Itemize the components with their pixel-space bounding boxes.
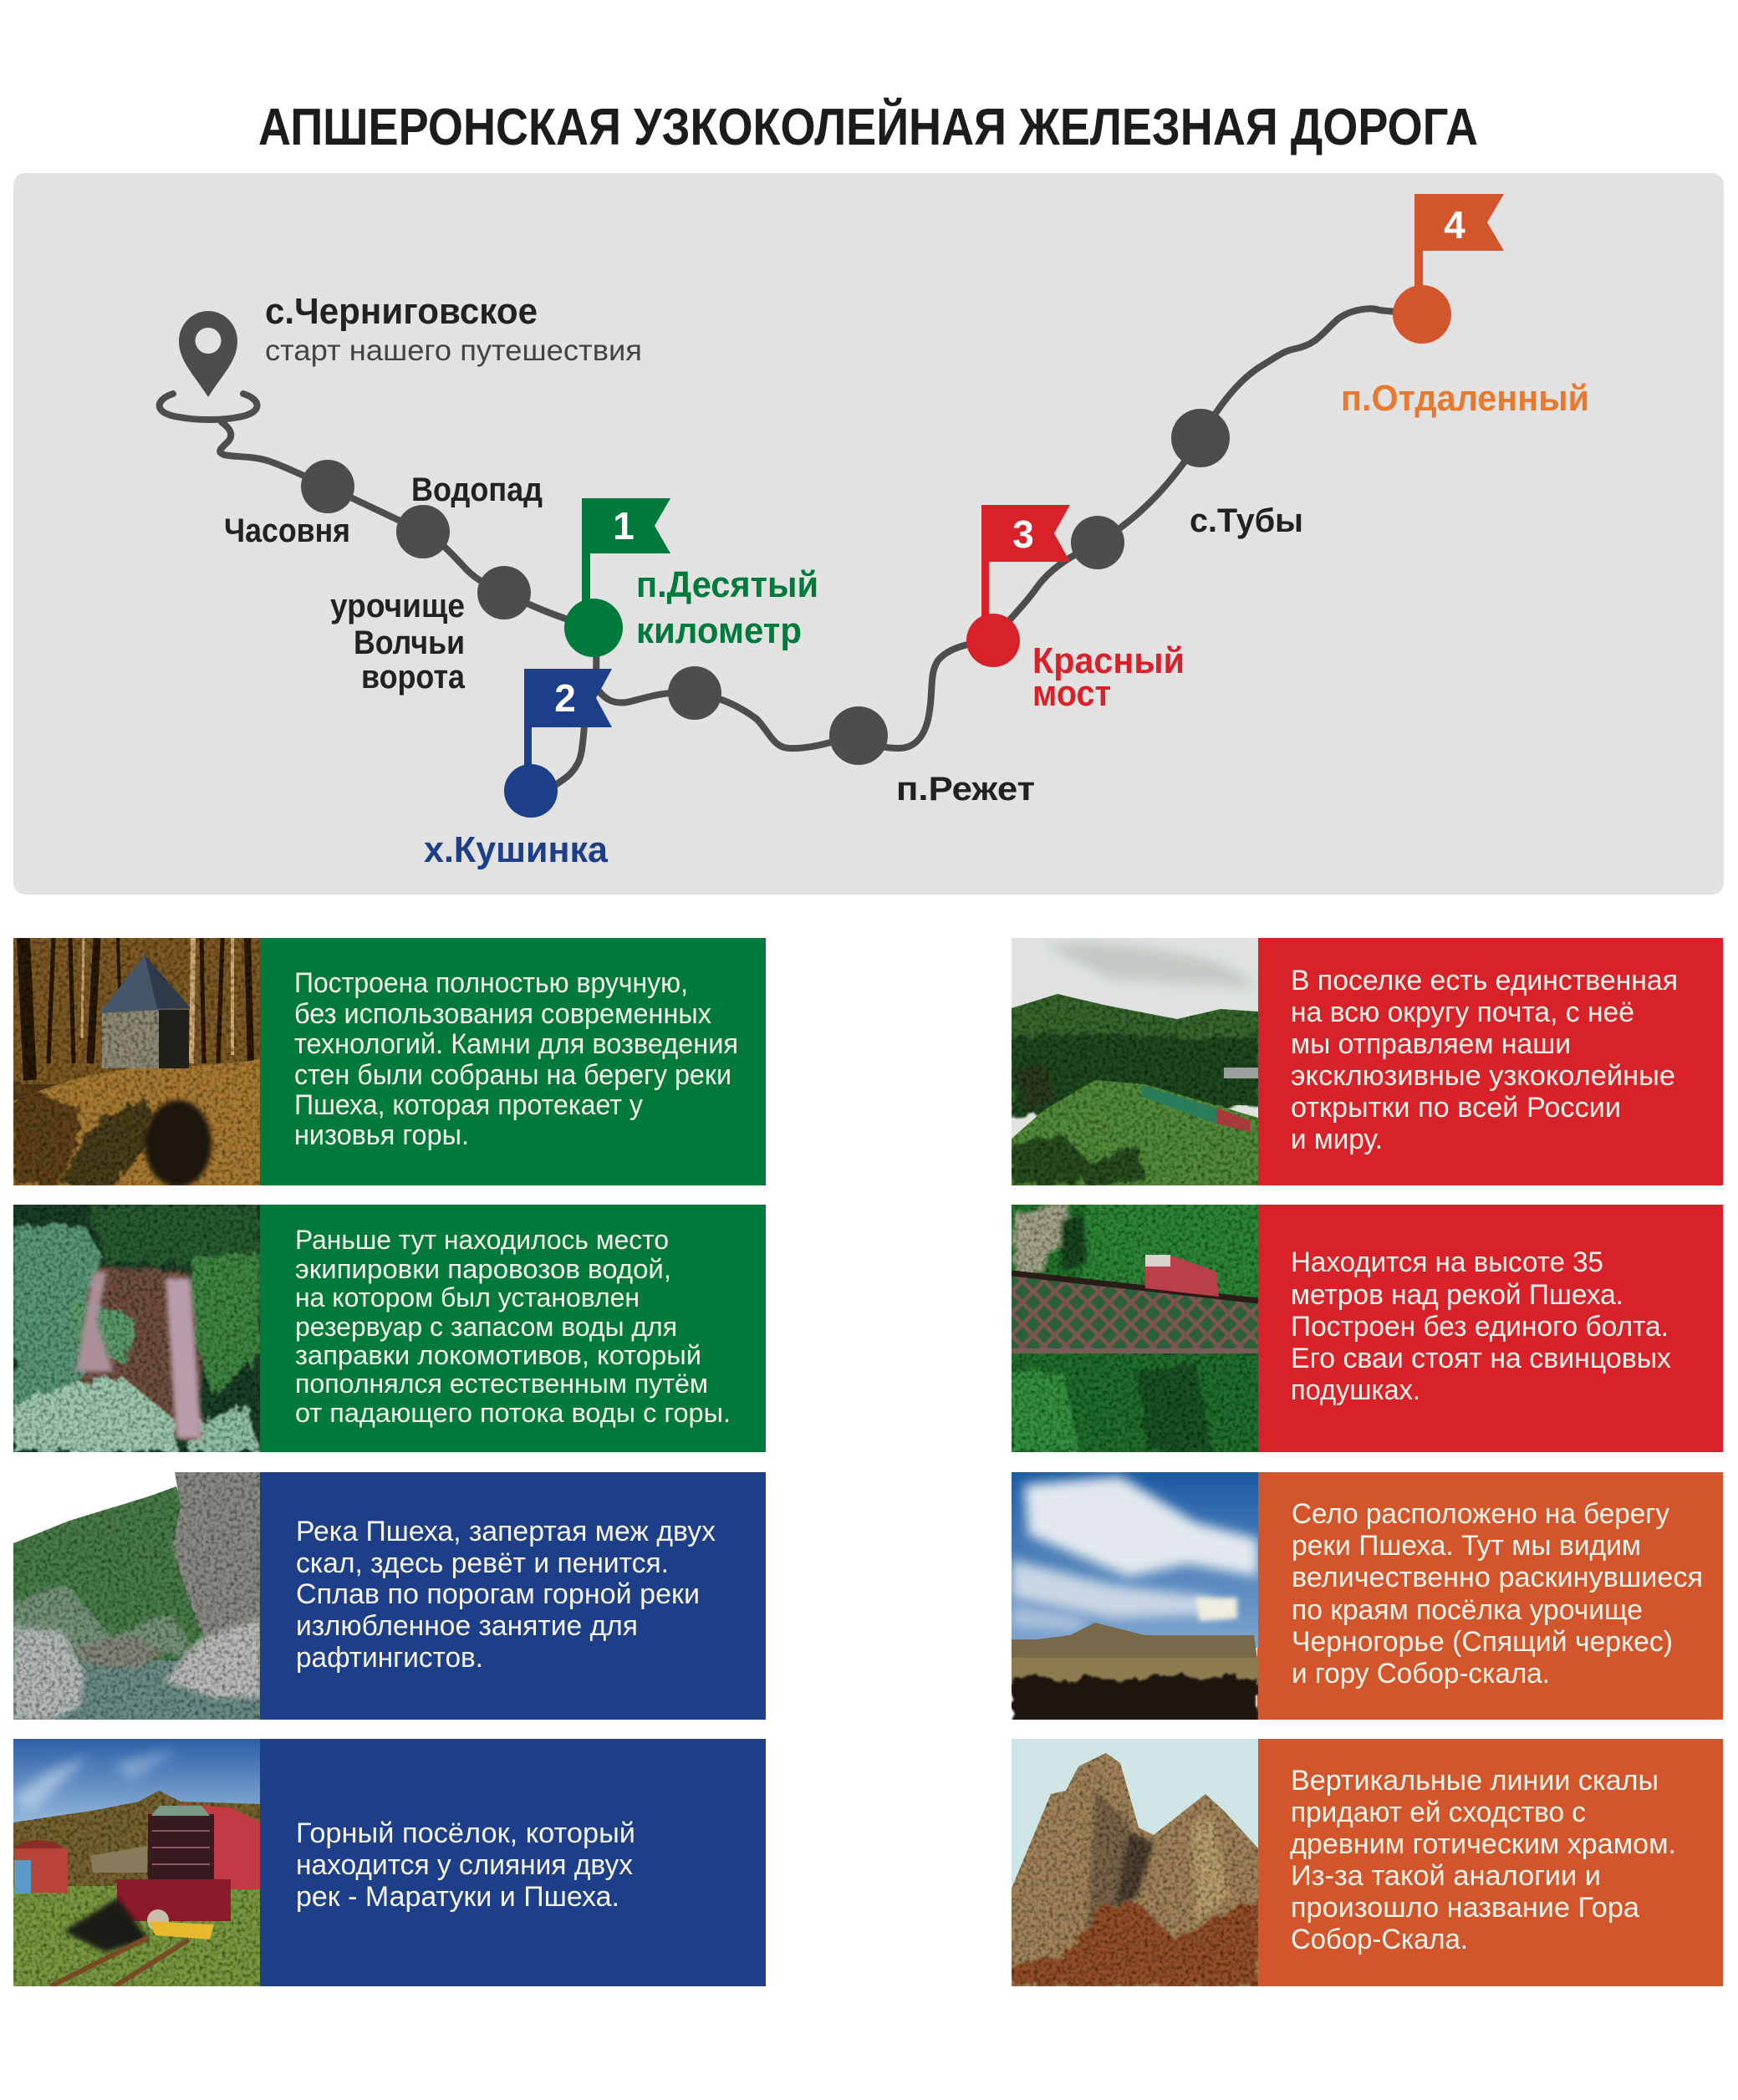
card text: стен были собраны на берегу реки [294,1059,731,1091]
card text: пополнялся естественным путём [295,1369,708,1399]
card text: придают ей сходство с [1291,1797,1586,1828]
icon: start location pin [160,311,257,420]
flag 1: green: 1 [613,504,635,548]
card background [1257,1739,1723,1986]
card text: рек - Маратуки и Пшеха. [296,1881,619,1913]
card text: Сплав по порогам горной реки [296,1578,700,1610]
card text: произошло название Гора [1291,1892,1639,1924]
card background [260,1472,766,1720]
card text: и миру. [1291,1124,1383,1155]
card text [296,1817,635,1913]
photo: Sobor rock [1012,1739,1258,1986]
photo: train in green valley [1012,938,1258,1185]
card text: экипировки паровозов водой, [295,1254,671,1284]
card text: низовья горы. [294,1119,469,1151]
label: Красный мост [1032,640,1185,714]
card text [1291,965,1678,1155]
photo: train on lattice bridge [1012,1205,1258,1452]
photo: waterfall [13,1205,260,1452]
card text [295,1225,731,1428]
card text [1290,1765,1676,1955]
card text: Раньше тут находилось место [295,1225,669,1255]
label: п.Десятый километр [636,564,818,651]
panel: chapel card [13,938,766,1187]
card text [294,967,738,1151]
label: п.Десятый километр: п.Десятый [636,564,818,605]
photo: chapel in forest [13,938,260,1187]
card text: Село расположено на берегу [1292,1498,1669,1530]
flag 2: blue [504,669,612,818]
card text: эксклюзивные узкоколейные [1291,1060,1675,1092]
card text: Построена полностью вручную, [294,967,688,999]
card text: древним готическим храмом. [1290,1828,1676,1860]
card text: Река Пшеха, запертая меж двух [296,1516,716,1547]
label: Красный мост: Красный [1032,640,1185,681]
panel: route map [13,173,1724,895]
card text: от падающего потока воды с горы. [295,1398,731,1428]
panel: red bridge card [1012,1205,1723,1452]
card text: Его сваи стоят на свинцовых [1291,1343,1671,1374]
station labels: ворота [361,659,466,696]
card text: Пшеха, которая протекает у [294,1089,643,1121]
card background [1257,1205,1723,1452]
card text [296,1516,716,1674]
photo: locomotive in village [13,1739,260,1986]
card text: Вертикальные линии скалы [1291,1765,1659,1797]
card text: находится у слияния двух [296,1849,633,1881]
flag 3: red [966,505,1070,667]
station labels: Водопад [411,471,543,508]
card text: скал, здесь ревёт и пенится. [296,1547,669,1579]
card text: на котором был установлен [295,1282,640,1312]
panel: waterfall card [13,1205,766,1452]
card text: Из-за такой аналогии и [1291,1860,1601,1892]
card text: мы отправляем наши [1291,1028,1571,1060]
card background [260,1205,766,1452]
card background [1257,938,1723,1185]
card text: по краям посёлка урочище [1292,1594,1643,1626]
card text: без использования современных [294,998,711,1030]
flag 4: orange [1393,194,1504,344]
gray station dots [301,409,1230,765]
station labels: п.Режет [896,771,1035,808]
card text: резервуар с запасом воды для [295,1312,677,1342]
railway track line [220,308,1422,798]
card text [1291,1246,1671,1406]
start label: старт нашего путешествия [265,334,642,367]
card text: В поселке есть единственная [1291,965,1678,996]
flag 4: orange: 4 [1444,203,1465,247]
panel: Tuby village card [1012,1472,1723,1731]
station labels: с.Тубы [1190,502,1303,539]
card text: заправки локомотивов, который [295,1340,701,1370]
card text: метров над рекой Пшеха. [1291,1279,1623,1311]
photo: clouds over mountains [1012,1472,1258,1731]
card text: Находится на высоте 35 [1291,1246,1603,1278]
label: п.Отдаленный: п.Отдаленный [1341,378,1589,419]
card text: реки Пшеха. Тут мы видим [1292,1530,1641,1562]
card text [1292,1498,1703,1690]
card text: Горный посёлок, который [296,1817,635,1849]
card text: открытки по всей России [1291,1092,1621,1124]
card text: и гору Собор-скала. [1292,1658,1550,1690]
card text: излюбленное занятие для [296,1610,638,1642]
panel: mountain village card [13,1739,766,1986]
map background [13,173,1724,895]
start label: с.Черниговское [265,291,538,332]
station labels: урочище [330,588,465,624]
card text: Черногорье (Спящий черкес) [1292,1626,1673,1658]
title: АПШЕРОНСКАЯ УЗКОКОЛЕЙНАЯ ЖЕЛЕЗНАЯ ДОРОГА [258,98,1478,156]
panel: Sobor rock card [1012,1739,1723,1986]
panel: post office card [1012,938,1723,1185]
card text: технологий. Камни для возведения [294,1028,738,1060]
card text: Построен без единого болта. [1291,1311,1669,1343]
card background [1257,1472,1723,1720]
card text: Собор-Скала. [1291,1924,1468,1955]
station labels: Волчьи [354,624,465,661]
panel: river card [13,1472,766,1720]
label: п.Десятый километр: километр [636,610,802,651]
label: Красный мост: мост [1032,673,1111,714]
station labels: Часовня [224,512,350,549]
card background [260,938,766,1185]
flag 1: green [564,498,670,657]
flag 3: red: 3 [1012,512,1034,556]
card background [260,1739,766,1986]
card text: рафтингистов. [296,1642,483,1674]
photo: river gorge [13,1472,260,1720]
card text: на всю округу почта, с неё [1291,996,1634,1028]
card text: величественно раскинувшиеся [1292,1562,1703,1593]
station labels [224,471,1303,808]
flag 2: blue: 2 [554,676,576,720]
card text: подушках. [1291,1374,1420,1406]
label: х.Кушинка: х.Кушинка [424,829,609,870]
start label [265,291,642,367]
